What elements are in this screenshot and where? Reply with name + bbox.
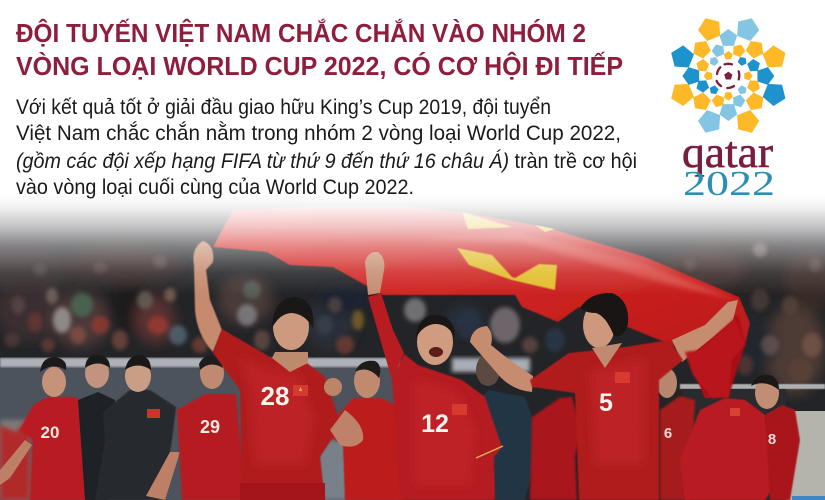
title: ĐỘI TUYẾN VIỆT NAM CHẮC CHẮN VÀO NHÓM 2	[16, 18, 586, 48]
jersey number 5: 5	[599, 389, 613, 417]
dark uniformed player	[476, 354, 556, 500]
arms	[470, 326, 533, 392]
Qatar 2022 logo	[667, 14, 790, 203]
jersey number 20: 20	[41, 423, 59, 442]
flag fold highlight	[415, 232, 735, 300]
intro text block: Việt Nam chắc chắn nằm trong nhóm 2 vòng loại World Cup 2022,	[16, 122, 621, 145]
draped flag end	[685, 318, 745, 398]
jersey number 8: 8	[768, 431, 776, 448]
intro text block: vào vòng loại cuối cùng của World Cup 2022.	[16, 176, 414, 199]
logo wordmark qatar: qatar	[682, 128, 773, 177]
player 29	[146, 356, 245, 500]
raised arm and fist	[193, 241, 222, 352]
crowd spectators	[4, 243, 822, 382]
red-shirted player behind	[530, 397, 581, 500]
logo year 2022: 2022	[683, 164, 775, 203]
jersey number 6: 6	[664, 425, 672, 442]
intro text block: Với kết quả tốt ở giải đầu giao hữu King’s Cup 2019, đội tuyển	[16, 96, 551, 119]
logo emblem of pentagons	[667, 14, 790, 137]
intro text block: (gồm các đội xếp hạng FIFA từ thứ 9 đến thứ 16 châu Á) tràn trề cơ hội	[16, 150, 637, 173]
staff member in dark jacket	[78, 355, 176, 500]
stadium crowd background	[0, 195, 825, 500]
raised fist and sleeve	[365, 252, 384, 295]
jersey number 12: 12	[421, 410, 449, 438]
player 5	[470, 293, 738, 500]
big Vietnamese flag	[213, 207, 750, 398]
title: VÒNG LOẠI WORLD CUP 2022, CÓ CƠ HỘI ĐI TIẾP	[16, 51, 623, 81]
player 20	[0, 357, 102, 500]
jersey number 28: 28	[261, 381, 289, 411]
jersey number 29: 29	[200, 417, 220, 437]
photo: celebrating Vietnam team	[0, 195, 825, 500]
staff in red jacket behind	[323, 361, 405, 500]
background players in red at right	[657, 368, 800, 500]
intro text block	[16, 96, 637, 199]
player 12	[365, 252, 503, 500]
stands: barrier and pitch side	[0, 358, 825, 500]
title	[16, 18, 623, 81]
flag yellow star pieces	[457, 212, 557, 290]
football at centre	[717, 64, 739, 88]
flag fold shade	[675, 315, 745, 396]
fade from white into photo	[0, 195, 825, 295]
player 28	[193, 241, 363, 500]
